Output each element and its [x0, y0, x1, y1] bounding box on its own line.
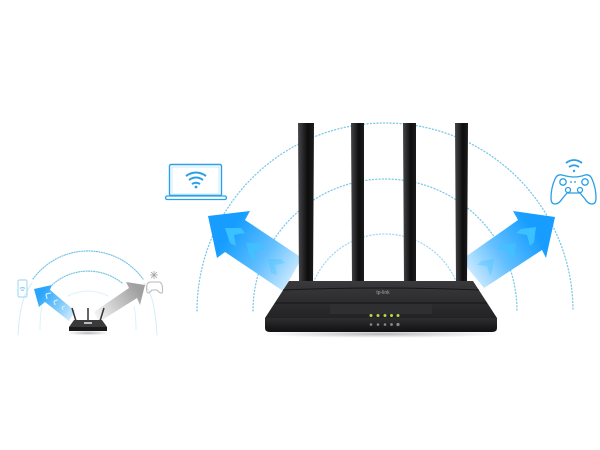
router shadow — [259, 330, 503, 338]
icon: gamepad with wifi — [551, 160, 596, 204]
router body top — [265, 281, 497, 318]
small blue arrow — [34, 285, 75, 321]
router front — [265, 318, 497, 332]
icon: small phone — [18, 280, 27, 297]
large router — [259, 123, 503, 338]
small grey arrow — [94, 282, 145, 322]
antennas — [298, 123, 468, 284]
status icons — [370, 323, 400, 326]
icon: laptop with wifi — [166, 164, 226, 200]
large blue arrow to gamepad — [461, 211, 555, 288]
status lights — [370, 314, 400, 317]
icon: small gamepad with broken signal — [146, 271, 163, 293]
large signal arcs — [197, 123, 573, 311]
small signal arcs — [18, 251, 157, 335]
large blue arrow to laptop — [208, 211, 302, 291]
small router — [66, 308, 110, 336]
logo: tp-link — [376, 290, 390, 296]
